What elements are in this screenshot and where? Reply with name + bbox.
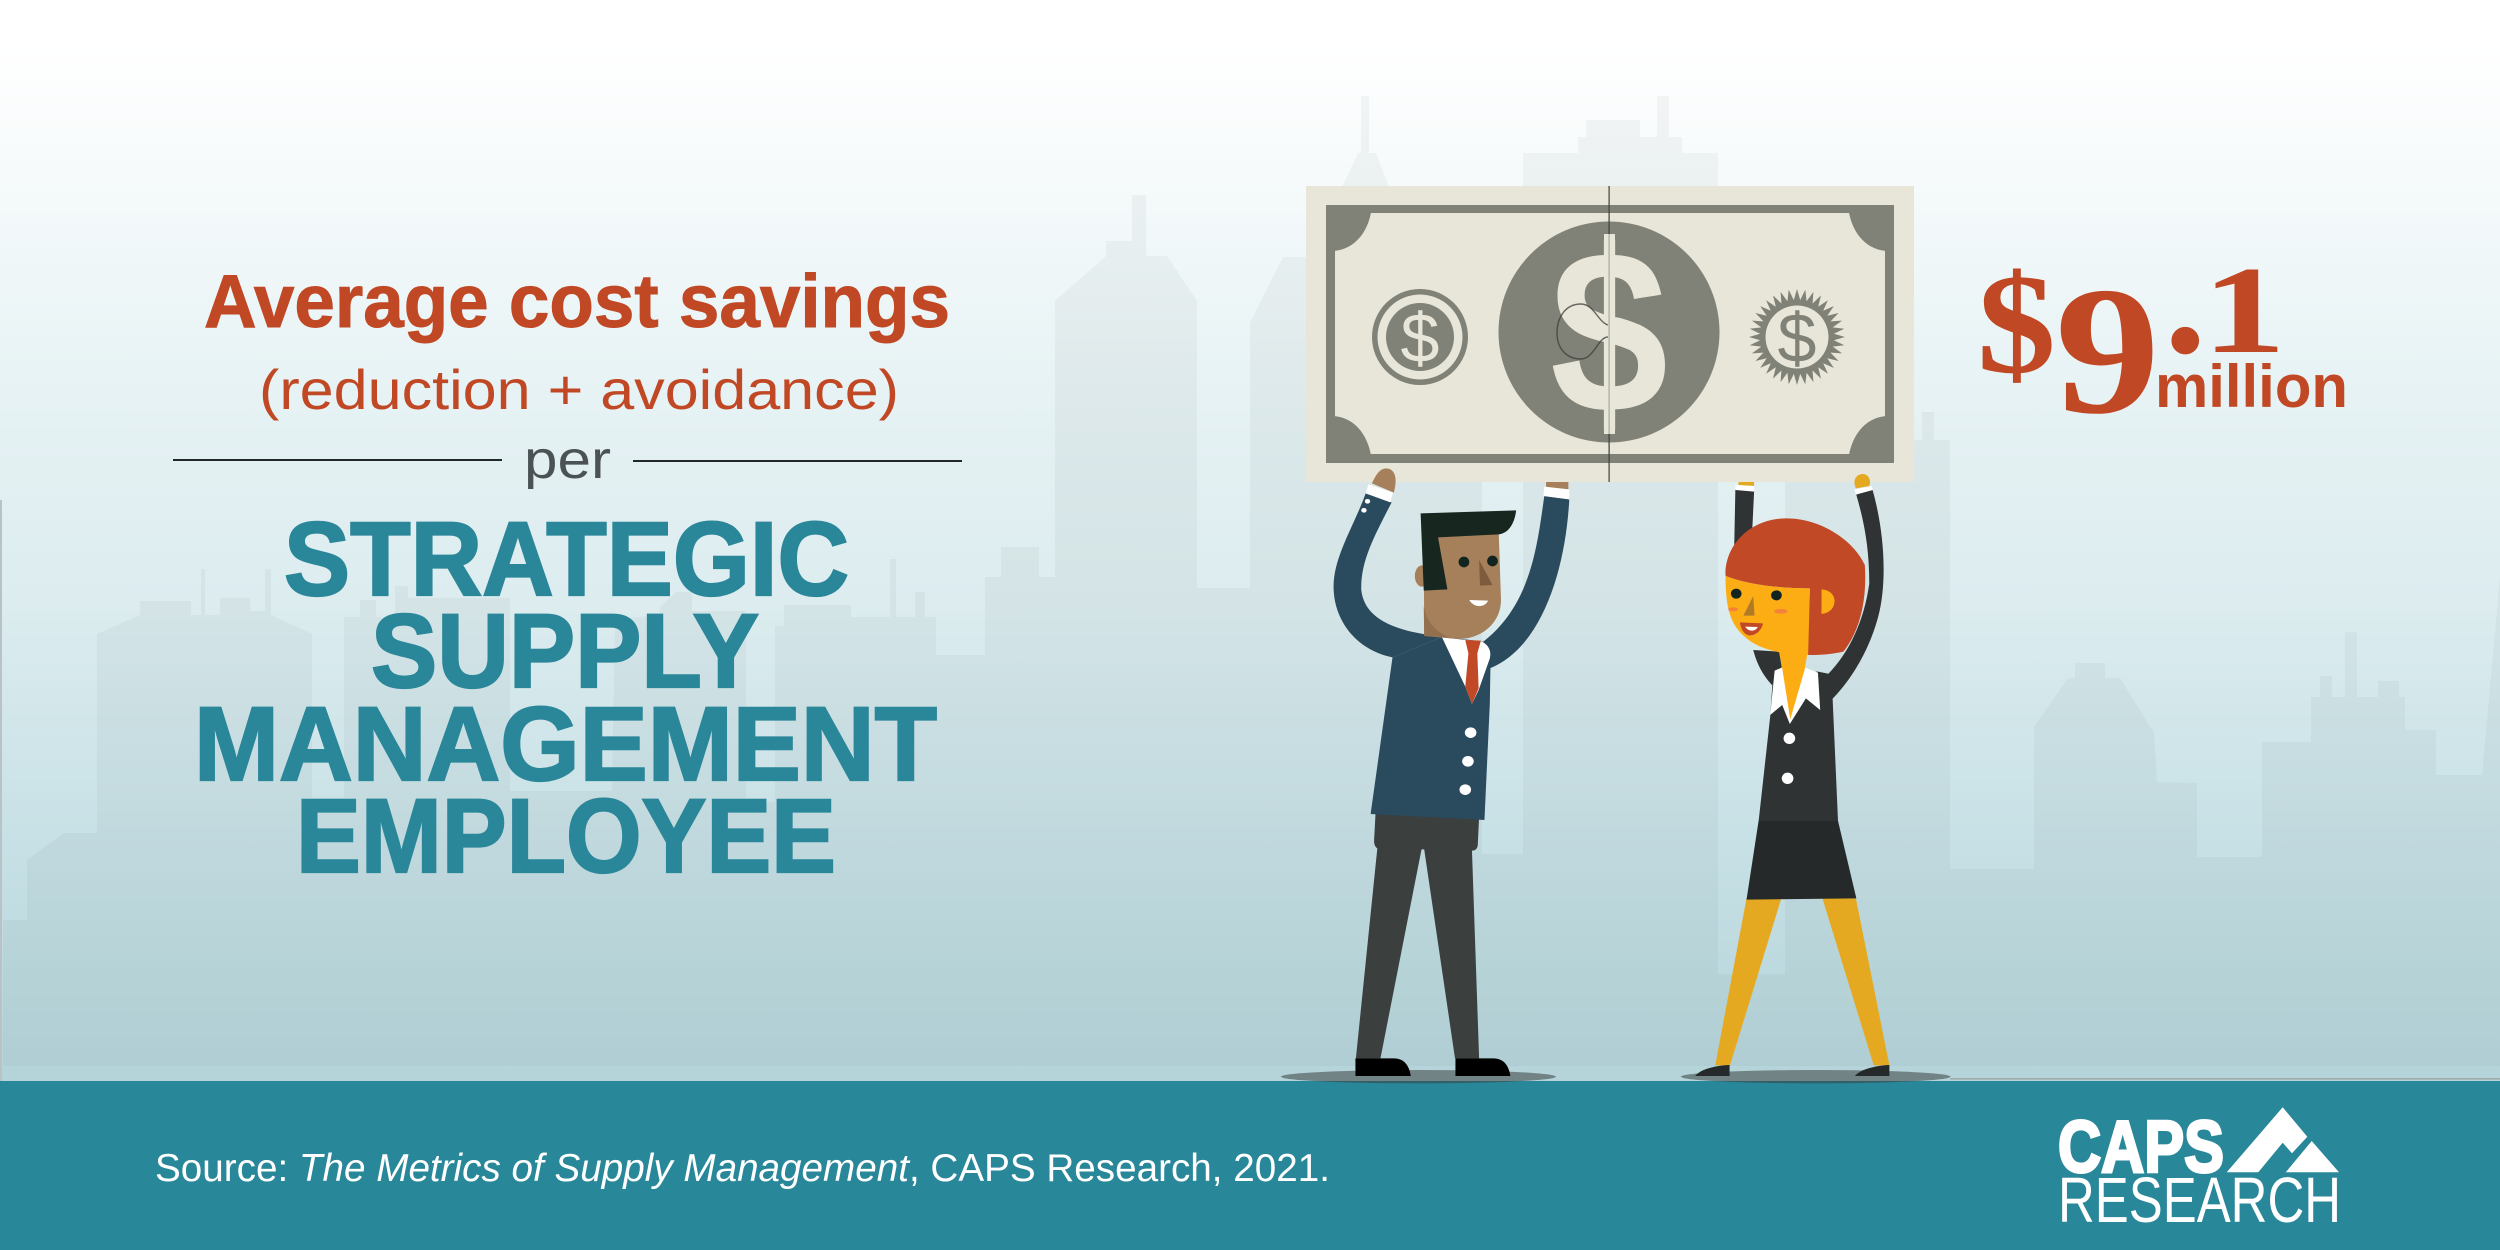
woman: cheeks bbox=[1728, 607, 1788, 614]
dollar bill bbox=[1306, 186, 1914, 482]
woman: hair bbox=[1725, 518, 1865, 655]
woman: skirt bbox=[1747, 821, 1856, 900]
businesswoman character bbox=[1695, 474, 1889, 1076]
price: digit 9: 9 bbox=[2055, 249, 2160, 452]
woman: right arm bbox=[1828, 489, 1884, 700]
woman: cuffs bbox=[1735, 485, 1873, 495]
man: cuffs bbox=[1366, 484, 1569, 502]
left seal bbox=[1372, 289, 1468, 385]
man: shoes bbox=[1355, 1058, 1510, 1076]
woman: legs bbox=[1715, 898, 1889, 1065]
heading: strategic supply management employee: EMPLOYEE bbox=[296, 778, 836, 895]
logo word: RESEARCH: RESEARCH bbox=[2058, 1164, 2341, 1236]
central dollar medallion bbox=[1498, 203, 1720, 462]
heading: strategic supply management employee: SUPPLY bbox=[371, 593, 759, 710]
woman: neck bbox=[1779, 652, 1808, 719]
woman: mouth bbox=[1740, 622, 1763, 635]
man: right arm bbox=[1476, 496, 1569, 668]
footer band bbox=[0, 1081, 2500, 1250]
bill frame bbox=[1326, 205, 1894, 463]
heading: strategic supply management employee: MANAGEMENT bbox=[194, 686, 937, 803]
woman: collar bbox=[1770, 667, 1820, 724]
price: dollar sign: $ bbox=[1977, 245, 2056, 403]
woman: face bbox=[1726, 576, 1810, 655]
logo mountain mark bbox=[2227, 1107, 2339, 1172]
man: trousers bbox=[1356, 813, 1479, 1058]
horizon line bbox=[1950, 1078, 2500, 1080]
divider with the word per: per bbox=[524, 430, 611, 490]
ground shadows bbox=[1281, 1070, 1951, 1083]
woman: nose bbox=[1743, 596, 1755, 616]
man: hair bbox=[1421, 510, 1516, 591]
price: decimal point: . bbox=[2164, 201, 2206, 389]
businessman character bbox=[1334, 468, 1569, 1076]
CAPS Research logo bbox=[2058, 1107, 2341, 1236]
man: jacket bbox=[1371, 637, 1491, 820]
left edge hairline bbox=[0, 500, 2, 1081]
left seal: $ bbox=[1401, 299, 1439, 377]
man: eyes bbox=[1459, 556, 1498, 567]
man: ear bbox=[1415, 565, 1429, 587]
subheading: reduction + avoidance: (reduction + avoidance) bbox=[259, 358, 899, 421]
heading: strategic supply management employee: STRATEGIC bbox=[284, 501, 849, 618]
price: word million: million bbox=[2155, 353, 2348, 420]
man: nose bbox=[1479, 560, 1493, 586]
bill corner ornaments bbox=[1326, 205, 1894, 463]
background city skyline bbox=[3, 96, 2500, 1066]
price figure: $9.1 million bbox=[1977, 201, 2348, 452]
man: smile bbox=[1469, 600, 1488, 606]
man: jaw shadow bbox=[1424, 607, 1450, 638]
central dollar medallion: $ bbox=[1550, 203, 1668, 462]
man: sleeve buttons bbox=[1361, 499, 1370, 513]
heading: average cost savings: Average cost savings bbox=[204, 259, 950, 343]
woman: jacket bbox=[1759, 672, 1838, 822]
man: tie bbox=[1465, 640, 1481, 704]
man: shirt collar bbox=[1442, 637, 1490, 704]
heading: strategic supply management employee bbox=[194, 501, 937, 895]
hands behind the bill bbox=[1546, 480, 1754, 489]
woman: jacket buttons bbox=[1782, 733, 1795, 784]
woman: eyes bbox=[1731, 589, 1782, 600]
woman: ear bbox=[1822, 589, 1835, 614]
right seal bbox=[1749, 289, 1845, 385]
bill centre seam bbox=[1608, 186, 1610, 482]
source citation: Source: The Metrics of Supply Management, CAPS Research, 2021. bbox=[155, 1147, 1330, 1190]
woman: raised hand bbox=[1854, 474, 1870, 488]
woman: shoes bbox=[1695, 1065, 1889, 1076]
right seal: $ bbox=[1778, 299, 1816, 377]
man: face bbox=[1424, 533, 1501, 639]
man: left arm bbox=[1334, 493, 1443, 657]
man: jacket buttons bbox=[1459, 727, 1476, 795]
headline block bbox=[173, 259, 962, 895]
woman: left arm bbox=[1734, 489, 1782, 685]
price: digit 1: 1 bbox=[2202, 242, 2286, 380]
logo word: CAPS: CAPS bbox=[2058, 1107, 2224, 1188]
man: raised hands bbox=[1372, 468, 1396, 493]
